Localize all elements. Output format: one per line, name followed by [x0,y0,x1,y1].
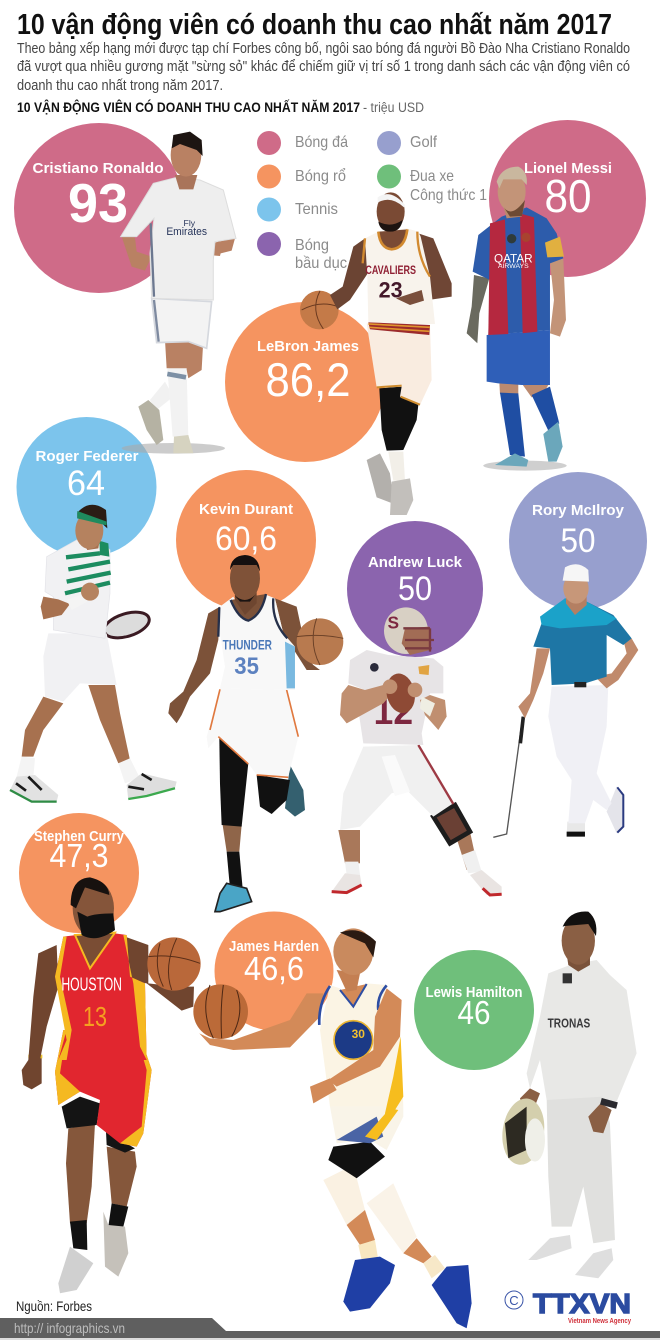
logo: TTXVN: C [509,1293,519,1308]
figure: Roger Federer [10,505,177,802]
legs [483,330,567,471]
bubble: LeBron James 86,2 [225,302,385,462]
bubble: James Harden 46,6: 46,6 [244,950,304,987]
footer bar: http:// infographics.vn [14,1320,125,1336]
bubble: LeBron James 86,2: 86,2 [266,353,350,406]
source note: Nguồn: Forbes [16,1298,92,1314]
chart subtitle: - triệu USD [363,100,424,115]
legend: Bóng [295,237,329,254]
bubble: Cristiano Ronaldo 93: Cristiano Ronaldo [32,160,164,177]
bubble: LeBron James 86,2: LeBron James [257,338,359,355]
bubble: Lionel Messi 80: Lionel Messi [524,160,612,177]
legend: Bóng rổ [295,167,346,185]
legend: Bóng đá [295,134,348,151]
figure: Stephen Curry: 30 [352,1027,365,1041]
figure: LeBron James [300,192,452,515]
footer bar [0,1318,660,1340]
bubble: Kevin Durant 60,6: 60,6 [215,520,277,558]
bubble: Lewis Hamilton 46 [414,950,534,1070]
bubble: James Harden 46,6 [214,912,334,1030]
upper body [330,192,452,335]
legend: bầu dục [295,255,347,272]
figure: Lewis Hamilton [498,912,637,1278]
upper body: AIRWAYS [498,264,529,270]
bubble: Cristiano Ronaldo 93 [14,123,184,293]
bubble: Roger Federer 64: Roger Federer [36,448,139,465]
figure: Andrew Luck: 12 [374,691,413,732]
figure: Stephen Curry [193,928,472,1328]
figure: Ronaldo [121,132,236,454]
intro text block [17,41,630,94]
bubble: Roger Federer 64 [16,417,156,557]
upper body: 13 [83,1001,107,1032]
upper body: CAVALIERS [365,263,416,277]
bubble: Lionel Messi 80 [489,120,646,277]
bubble: Andrew Luck 50: 50 [398,570,432,608]
chart subtitle: 10 VẬN ĐỘNG VIÊN CÓ DOANH THU CAO NHẤT NĂM 2017 [17,100,360,115]
bubble: Stephen Curry 47,3: 47,3 [50,837,108,874]
figure: Andrew Luck [332,607,502,895]
bubble: Kevin Durant 60,6 [176,470,316,610]
legend [257,131,487,272]
bubble: Lewis Hamilton 46: 46 [458,994,490,1031]
intro text block: doanh thu cao nhất trong năm 2017. [17,78,223,94]
upper body [467,167,566,343]
bubble: Lewis Hamilton 46: Lewis Hamilton [426,985,522,1001]
legend: Công thức 1 [410,187,487,204]
bubble: Lionel Messi 80: 80 [544,170,592,222]
bubble: Rory McIlroy 50: 50 [560,522,596,560]
upper body: 23 [379,277,403,302]
legend: Đua xe [410,168,454,185]
bubble: James Harden 46,6: James Harden [229,939,319,955]
legend: Tennis [295,201,338,218]
figure: Kevin Durant: THUNDER [223,636,272,652]
logo: TTXVN [505,1288,631,1325]
lower body [300,291,432,515]
figure: Lionel Messi [467,167,567,471]
bubble: Andrew Luck 50 [347,521,483,657]
figure: James Harden [22,877,201,1293]
bubble: Roger Federer 64: 64 [67,464,105,503]
bubble: Stephen Curry 47,3: Stephen Curry [34,829,124,845]
figure: Rory McIlroy [493,564,638,837]
upper body: HOUSTON [61,974,122,995]
figure: Lewis Hamilton: TRONAS [548,1016,590,1030]
figure: Kevin Durant: 35 [234,653,259,680]
bubble: Stephen Curry 47,3 [19,813,139,933]
bubble: Andrew Luck 50: Andrew Luck [368,554,463,571]
logo: TTXVN: Vietnam News Agency [568,1318,631,1325]
upper body [28,877,201,1060]
upper body: QATAR [494,252,533,266]
lower body [22,1030,152,1293]
figure: Kevin Durant [168,555,343,912]
legend: Golf [410,134,438,151]
figure: Andrew Luck: S [388,612,399,632]
bubble: Rory McIlroy 50: Rory McIlroy [532,502,625,519]
figure: Ronaldo: Fly [184,218,196,228]
bubble: Rory McIlroy 50 [509,472,647,610]
figure: Ronaldo: Emirates [166,226,207,238]
logo: TTXVN: TTXVN [533,1288,631,1319]
bubble: Kevin Durant 60,6: Kevin Durant [199,501,293,518]
bubble: Cristiano Ronaldo 93: 93 [68,172,128,234]
